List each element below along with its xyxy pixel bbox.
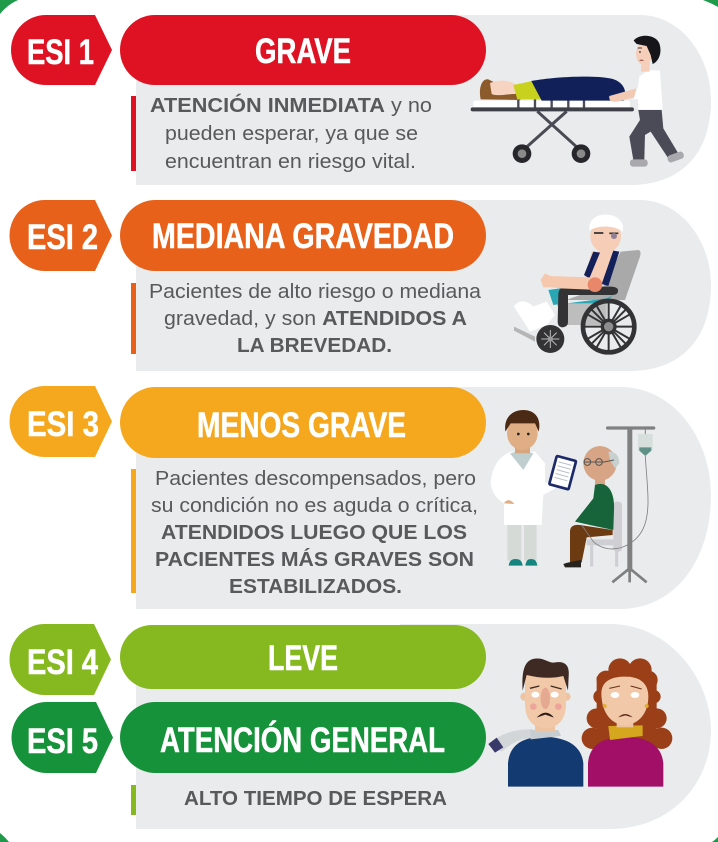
icon: stretcher with patient and nurse (471, 36, 685, 167)
description text: pueden esperar, ya que se (165, 123, 418, 145)
ESI 5 tag: ESI 5 (27, 722, 98, 761)
green corner: bottom left (0, 833, 9, 842)
heading pill: mediana gravedad: MEDIANA GRAVEDAD (152, 217, 454, 256)
accent bar (131, 96, 136, 171)
panel: ESI 1 grave (11, 15, 711, 185)
icon: patient in wheelchair (514, 215, 641, 353)
ESI 1 tag: ESI 1 (27, 33, 94, 72)
panel: ESI 2 mediana gravedad (10, 200, 711, 371)
icon: doctor, elderly patient and IV drip (491, 410, 655, 582)
panel background (136, 387, 711, 609)
panel: ESI 4 and 5 leve (10, 624, 711, 829)
ESI 1 tag (11, 15, 112, 85)
description text: Pacientes de alto riesgo o mediana (149, 281, 482, 303)
heading pill: leve: LEVE (268, 639, 338, 678)
ESI 4 tag: ESI 4 (27, 643, 98, 682)
description text (150, 93, 432, 173)
accent bar (131, 283, 136, 354)
description text: Pacientes descompensados, pero (155, 468, 476, 490)
description text: ESTABILIZADOS. (229, 576, 402, 598)
description text: su condición no es aguda o crítica, (151, 495, 478, 517)
ESI 5 tag (11, 702, 113, 773)
description text (149, 281, 482, 357)
description text: gravedad, y son ATENDIDOS A (164, 308, 467, 330)
accent bar (131, 469, 136, 593)
description text: ATENDIDOS LUEGO QUE LOS (161, 522, 467, 544)
heading pill: grave: GRAVE (255, 32, 351, 71)
description text: ATENCIÓN INMEDIATA y no (150, 93, 432, 117)
panel background (136, 200, 711, 371)
description text: encuentran en riesgo vital. (165, 151, 416, 173)
heading pill: menos grave: MENOS GRAVE (197, 406, 406, 445)
accent bar (131, 785, 136, 815)
green corner: top left (0, 0, 18, 14)
heading pill: leve (120, 625, 486, 689)
green corner: bottom right (712, 837, 718, 842)
panel background (136, 15, 711, 185)
description text: LA BREVEDAD. (237, 335, 392, 357)
ESI 3 tag (10, 386, 112, 457)
heading pill: grave (120, 15, 486, 85)
ESI 2 tag: ESI 2 (27, 218, 98, 257)
green corner: top right (703, 0, 718, 7)
ESI 3 tag: ESI 3 (27, 405, 99, 444)
icon: sick man and woman (488, 658, 672, 787)
ESI 2 tag (10, 200, 112, 271)
heading pill: mediana gravedad (120, 200, 486, 271)
panel: ESI 3 menos grave (10, 386, 711, 609)
panel background (136, 624, 711, 829)
ESI 4 tag (10, 624, 111, 695)
description text: ALTO TIEMPO DE ESPERA (184, 788, 447, 810)
description text: PACIENTES MÁS GRAVES SON (155, 548, 474, 571)
heading pill: atención general: ATENCIÓN GENERAL (160, 720, 445, 760)
description text (151, 468, 478, 598)
heading pill: menos grave (120, 387, 486, 458)
heading pill: atención general (120, 702, 486, 773)
